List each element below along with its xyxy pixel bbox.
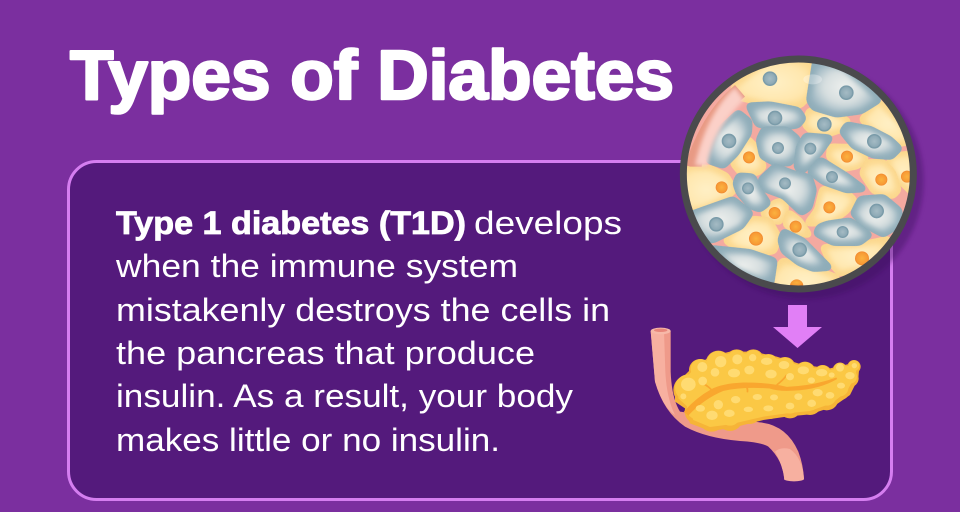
grey cells (690, 60, 899, 283)
pancreatic duct (685, 375, 837, 414)
icon: magnified pancreas cells (679, 59, 924, 302)
lens frame (683, 59, 913, 289)
line 3: mistakenly destroys the cells in (116, 292, 610, 328)
orange cell nuclei (716, 151, 913, 286)
lens glare (685, 74, 822, 167)
duodenum tube (651, 328, 804, 481)
line 1 rest: develops (474, 205, 622, 241)
grey cell nuclei (709, 72, 884, 257)
text block: type 1 description (115, 205, 622, 458)
title: Types of Diabetes (70, 36, 674, 114)
panel: type 1 diabetes (68, 162, 892, 500)
line 5: insulin. As a result, your body (116, 378, 573, 414)
yellow cells (679, 60, 917, 302)
arrow: down to pancreas (773, 305, 822, 348)
pancreas lobes (673, 349, 861, 432)
line 4: the pancreas that produce (116, 335, 535, 371)
line 6: makes little or no insulin. (116, 422, 500, 458)
line 1 bold lead: Type 1 diabetes (T1D) (116, 205, 466, 241)
icon: pancreas and duodenum (651, 328, 861, 481)
lobe highlights (680, 354, 857, 420)
line 2: when the immune system (115, 248, 518, 284)
